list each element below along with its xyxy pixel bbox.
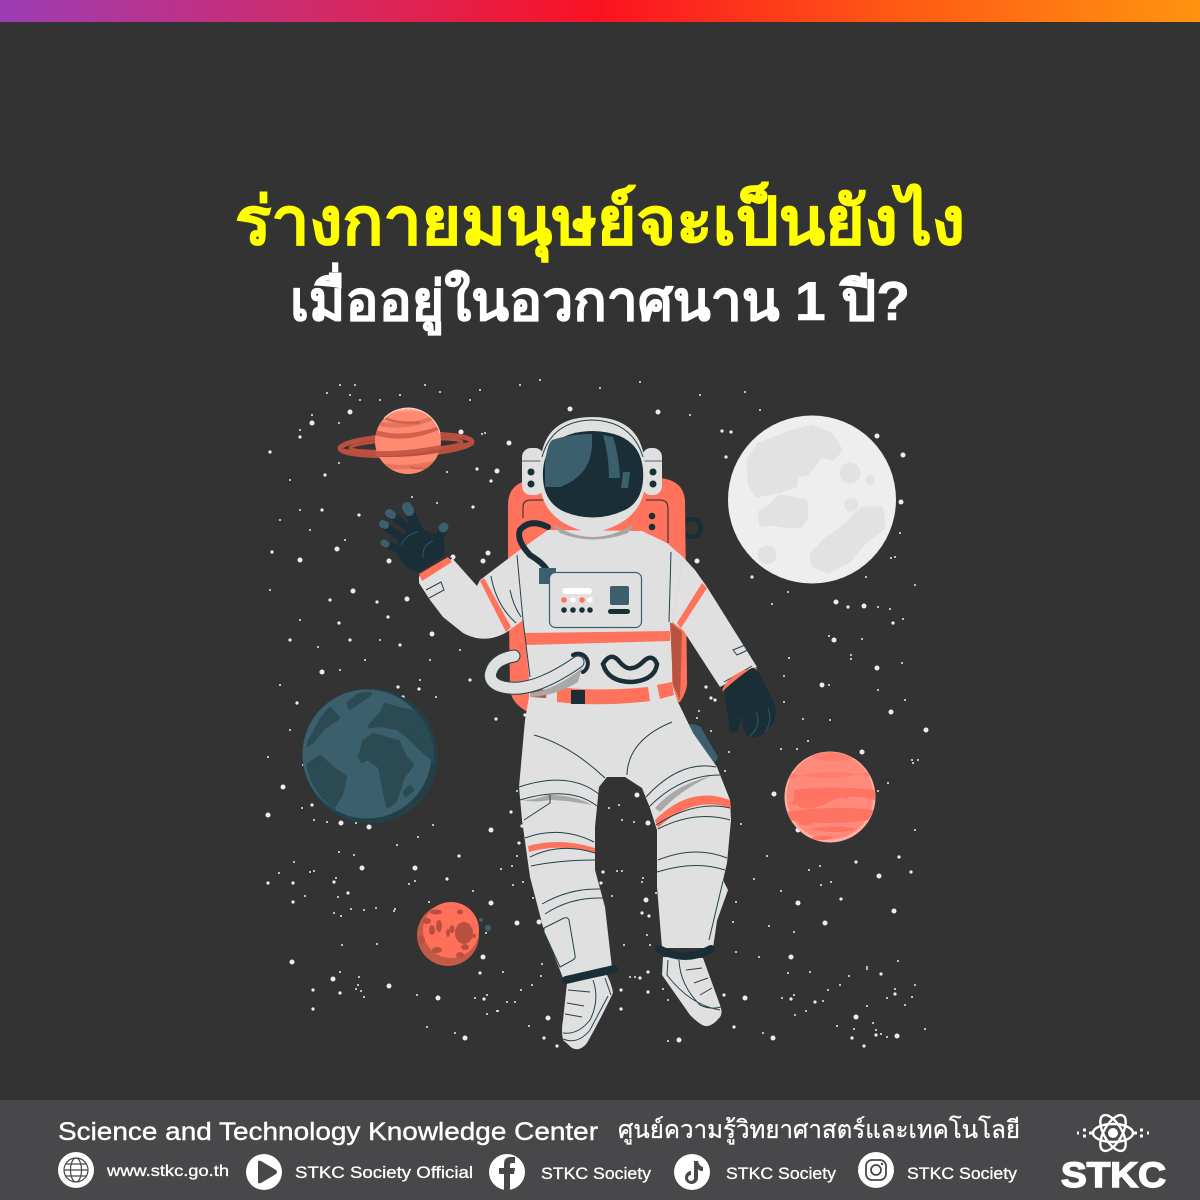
suit seam lines <box>419 552 752 940</box>
planet: small cratered mars <box>417 902 479 966</box>
icon: globe <box>58 1152 94 1188</box>
youtube label: STKC Society Official <box>295 1163 473 1182</box>
footer band <box>0 1100 1200 1200</box>
icon: facebook <box>489 1154 525 1190</box>
torso and legs <box>517 530 731 978</box>
logo: atom mark <box>1077 1111 1149 1155</box>
tiktok label: STKC Society <box>726 1164 837 1183</box>
title <box>235 181 965 336</box>
visor <box>543 431 643 518</box>
icon: play <box>246 1154 282 1190</box>
title line 1: ร่างกายมนุษย์จะเป็นยังไง <box>235 181 965 263</box>
hose shadow <box>530 668 582 697</box>
planet: red gas planet <box>784 746 876 842</box>
tube cable <box>519 523 548 570</box>
small teal moons <box>479 918 491 931</box>
backpack <box>508 478 687 712</box>
planet: ringed planet <box>339 404 474 474</box>
footer org name thai: ศูนย์ความรู้วิทยาศาสตร์และเทคโนโลยี <box>618 1115 1020 1145</box>
right glove <box>724 668 776 737</box>
collar shadow <box>553 524 634 540</box>
icon: tiktok <box>674 1154 710 1190</box>
footer org name english: Science and Technology Knowledge Center <box>58 1118 598 1146</box>
ring behind backpack <box>683 519 701 537</box>
helmet ear pieces <box>522 448 662 495</box>
logo: STKC wordmark: STKC <box>1061 1156 1166 1195</box>
oxygen pack under right leg <box>687 724 718 766</box>
left glove <box>383 507 445 573</box>
icon: instagram <box>858 1152 894 1188</box>
knee guard right calf <box>700 880 728 948</box>
star field <box>268 380 926 1046</box>
cable connector <box>539 568 556 584</box>
helmet <box>540 417 645 533</box>
waist hose right <box>603 657 657 682</box>
instagram label: STKC Society <box>907 1164 1018 1183</box>
facebook label: STKC Society <box>541 1164 652 1183</box>
chest panel <box>550 572 642 628</box>
website: www.stkc.go.th <box>106 1163 229 1180</box>
planet: earth <box>302 688 438 824</box>
leg shadows <box>522 776 711 812</box>
waist hose left <box>490 654 588 688</box>
right strap shadow <box>670 622 682 700</box>
planet: moon <box>728 416 896 584</box>
leg bands <box>528 842 595 853</box>
arm bands <box>480 578 511 632</box>
top gradient bar <box>0 0 1200 22</box>
arm left raised <box>419 552 523 639</box>
title line 2: เมื่ออยู่ในอวกาศนาน 1 ปี? <box>290 262 910 336</box>
arm right <box>672 557 757 687</box>
boots <box>562 949 722 1049</box>
suit <box>419 530 757 978</box>
calf pocket <box>544 918 575 967</box>
astronaut <box>383 417 776 1049</box>
belt <box>530 688 547 698</box>
waist band <box>525 631 670 645</box>
glove cuffs <box>419 557 452 581</box>
